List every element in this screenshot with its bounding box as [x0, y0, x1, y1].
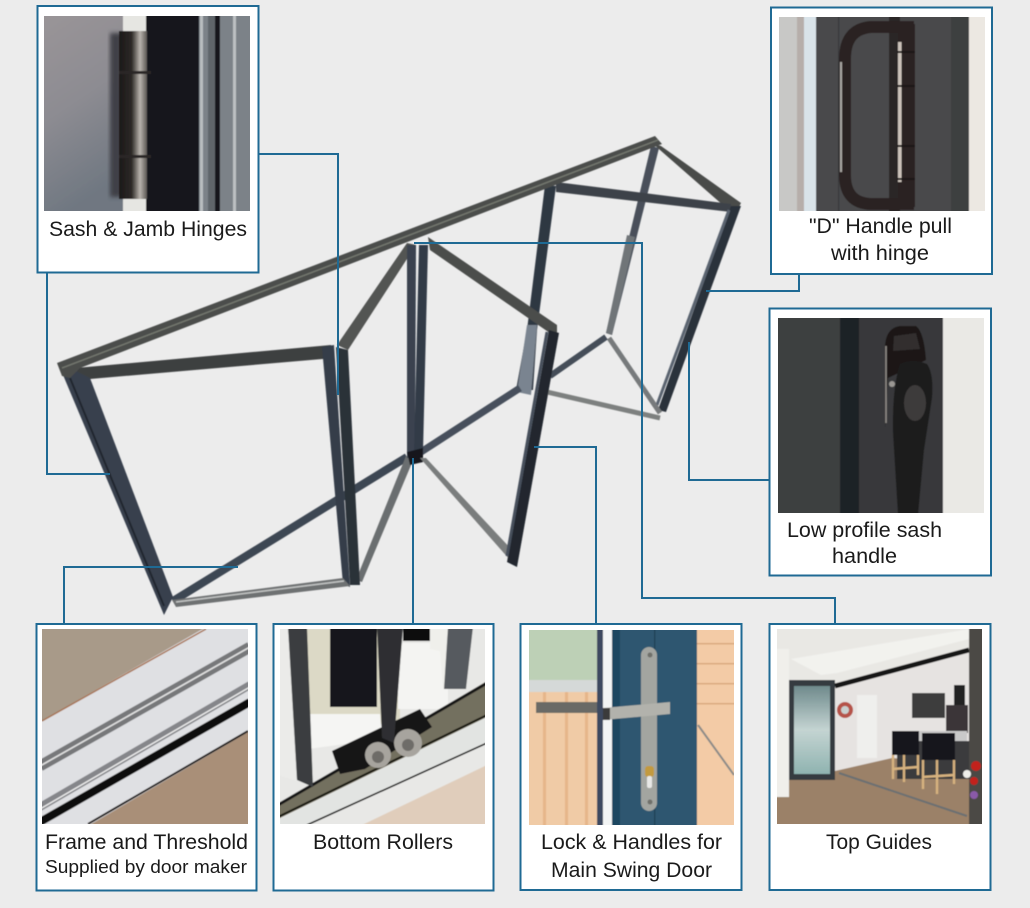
leader: D handle [706, 274, 799, 291]
leader: frame and threshold [64, 567, 238, 623]
label: Lock & Handles for [541, 831, 722, 854]
panel: sash and jamb hinges [38, 6, 258, 272]
panel: D handle pull: with hinge [830, 242, 929, 265]
leader: sash handle [689, 342, 769, 480]
photo: sash handle [778, 318, 984, 513]
photo: hinge [44, 16, 250, 211]
middle panel: leaves [336, 237, 559, 585]
photo: threshold [42, 629, 248, 824]
label: Top Guides [826, 831, 932, 854]
label: Sash & Jamb Hinges [49, 218, 247, 241]
panel: lock and handles [520, 624, 742, 890]
photo: rollers [280, 629, 485, 824]
panel: bottom rollers [274, 624, 494, 890]
leader lines [47, 154, 835, 623]
label: Frame and Threshold [45, 831, 248, 854]
leader: sash hinge to panel [258, 154, 338, 395]
bi-fold door frame illustration [57, 136, 741, 615]
panel: D handle pull [771, 8, 992, 274]
panel: frame and threshold: Supplied by door maker [45, 857, 247, 877]
floor track diagonal [173, 388, 520, 601]
panel: frame and threshold [36, 624, 256, 890]
label: Low profile sash [787, 519, 942, 542]
back panel: upper hinge rail [516, 143, 741, 418]
panel: low profile sash handle: handle [832, 545, 897, 568]
photo: lock [529, 630, 734, 825]
panel: lock and handles: Main Swing Door [551, 859, 712, 882]
label: "D" Handle pull [809, 215, 952, 238]
panel: top guides [770, 624, 990, 890]
leader: bottom rollers [412, 458, 414, 623]
photo: D handle [779, 17, 985, 211]
leader: lock and handles [534, 447, 596, 623]
leader: top guides [414, 243, 835, 623]
label: Bottom Rollers [313, 831, 453, 854]
top head rail [57, 136, 662, 378]
leader: sash hinge to jamb [47, 272, 110, 474]
panel: low profile sash handle [770, 308, 991, 576]
photo: room [777, 629, 982, 824]
front panel: frame and jamb [58, 345, 350, 615]
